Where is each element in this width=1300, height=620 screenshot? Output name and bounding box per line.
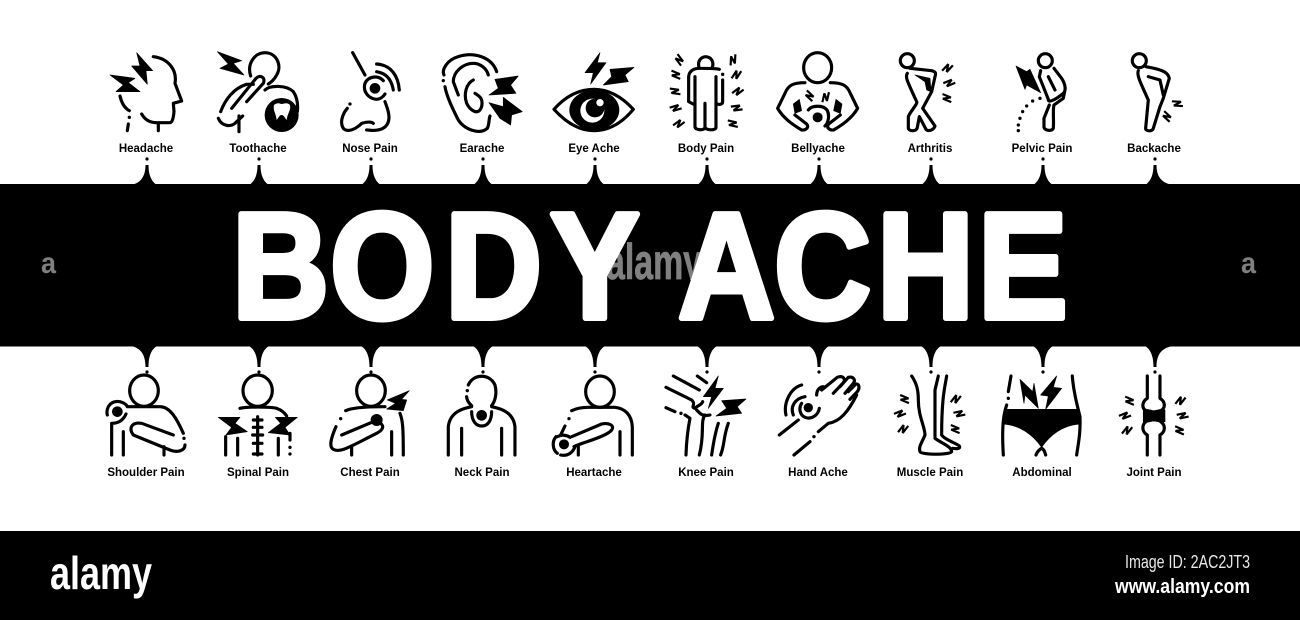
watermark descender mask <box>600 280 700 295</box>
icon: chest pain <box>331 375 409 455</box>
bottom connectors <box>131 346 1173 374</box>
icon: earache <box>442 55 522 131</box>
title: BODY ACHE <box>232 183 1068 351</box>
label: neck pain: Neck Pain <box>455 467 509 479</box>
icon: arthritis <box>900 54 956 131</box>
label: knee pain: Knee Pain <box>678 467 734 479</box>
watermark left: a <box>41 247 56 280</box>
icon: body pain <box>668 53 745 130</box>
icon: neck pain <box>448 376 515 455</box>
icon: headache <box>110 53 182 131</box>
image id: Image ID: 2AC2JT3 <box>1125 552 1250 572</box>
icon: nose pain <box>342 53 399 130</box>
footer logo: alamy <box>50 547 152 599</box>
label: spinal pain: Spinal Pain <box>227 467 289 479</box>
label: hand ache: Hand Ache <box>788 467 848 479</box>
label: bellyache: Bellyache <box>791 143 845 155</box>
label: eye ache: Eye Ache <box>568 143 620 155</box>
icon: abdominal <box>1003 376 1080 455</box>
label: shoulder pain: Shoulder Pain <box>107 467 185 479</box>
icon: bellyache <box>778 53 858 130</box>
icon: heartache <box>553 376 632 455</box>
icon: joint pain <box>1119 376 1189 455</box>
icon: muscle pain <box>894 376 966 454</box>
label: pelvic pain: Pelvic Pain <box>1012 143 1072 155</box>
icon: eye ache <box>554 53 634 131</box>
label: muscle pain: Muscle Pain <box>897 467 963 479</box>
icon: backache <box>1132 54 1184 131</box>
label: chest pain: Chest Pain <box>340 467 400 479</box>
icon: toothache <box>217 52 299 132</box>
watermark right: a <box>1241 247 1256 280</box>
watermark centre: alamy <box>606 234 702 290</box>
icon: hand ache <box>779 377 859 455</box>
central black band <box>0 184 1300 346</box>
label: earache: Earache <box>460 143 504 155</box>
icon: shoulder pain <box>107 375 186 455</box>
label: joint pain: Joint Pain <box>1127 467 1181 479</box>
icon: spinal pain <box>218 375 297 456</box>
website: www.alamy.com <box>1114 576 1250 598</box>
footer bar <box>0 531 1300 620</box>
top connectors <box>131 157 1173 185</box>
label: toothache: Toothache <box>229 143 287 155</box>
label: backache: Backache <box>1127 143 1181 155</box>
label: arthritis: Arthritis <box>908 143 952 155</box>
label: body pain: Body Pain <box>678 143 734 155</box>
label: headache: Headache <box>119 143 173 155</box>
label: abdominal: Abdominal <box>1012 467 1072 479</box>
icon: pelvic pain <box>1016 54 1065 132</box>
icon: knee pain <box>666 376 746 455</box>
label: nose pain: Nose Pain <box>342 143 398 155</box>
label: heartache: Heartache <box>566 467 622 479</box>
